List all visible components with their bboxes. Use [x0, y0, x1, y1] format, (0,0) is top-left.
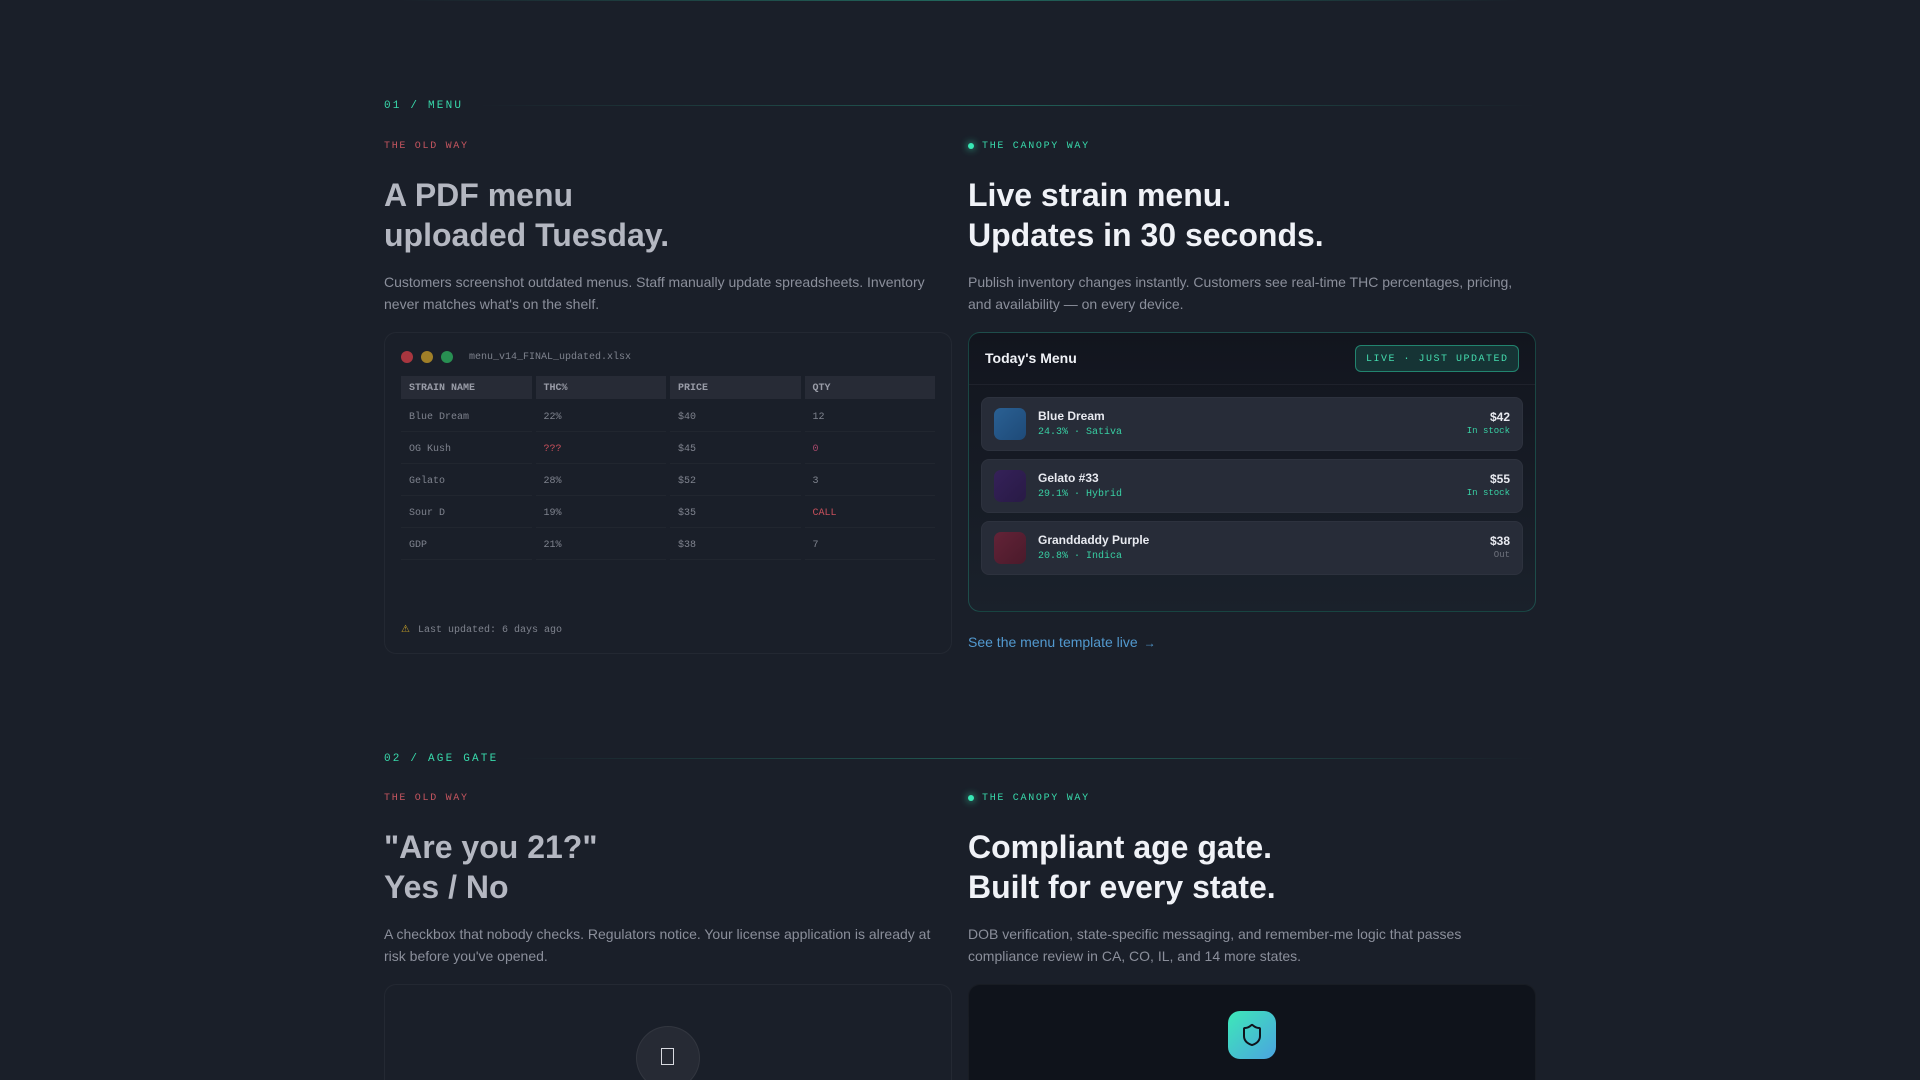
canopy way eyebrow: THE CANOPY WAY: [982, 793, 1090, 804]
spreadsheet table: STRAIN NAME: [409, 383, 475, 394]
old way eyebrow: THE OLD WAY: [384, 141, 469, 152]
strain info: Granddaddy Purple: [1038, 533, 1149, 547]
menu row: gelato: [981, 459, 1523, 513]
panel: spreadsheet mockup: [384, 332, 952, 654]
spreadsheet table: $52: [678, 476, 696, 487]
menu row: granddaddy purple: Out: [1494, 550, 1510, 560]
link: menu template: See the menu template live →: [968, 634, 1156, 650]
spreadsheet table: 0: [812, 444, 819, 455]
strain info: Gelato #33: [1038, 471, 1099, 485]
spreadsheet table: CALL: [812, 508, 837, 519]
old way description: Customers screenshot outdated menus. Staff manually update spreadsheets. Inventory: [384, 274, 925, 290]
old way headline: "Are you 21?": [384, 829, 598, 865]
spreadsheet table: PRICE: [678, 383, 708, 394]
spreadsheet table: 19%: [544, 508, 562, 519]
panel: old way heading column, menu: [384, 141, 925, 312]
icon: shield badge: [1228, 1011, 1276, 1059]
strain info: Blue Dream: [1038, 409, 1105, 423]
icon: circle with missing glyph: [636, 1026, 700, 1080]
section label: 02 / age gate: 02 / AGE GATE: [384, 753, 498, 765]
menu row: granddaddy purple: [981, 521, 1523, 575]
spreadsheet table: 12: [812, 412, 825, 423]
old way description: [384, 274, 925, 312]
warning footer: ⚠: [401, 624, 410, 635]
menu row: gelato: 29.1% · Hybrid: [1038, 489, 1122, 500]
canopy way description: DOB verification, state-specific messaging, and remember-me logic that passes: [968, 926, 1461, 942]
spreadsheet table: [401, 376, 935, 551]
spreadsheet table: 28%: [544, 476, 562, 487]
canopy way headline: Live strain menu.: [968, 177, 1231, 213]
price: $38: [1490, 534, 1510, 548]
old way headline: [384, 177, 669, 253]
price: $55: [1490, 472, 1510, 486]
old way description: [384, 926, 930, 964]
menu row: blue dream: [981, 397, 1523, 451]
spreadsheet table: 3: [812, 476, 819, 487]
canopy way description: [968, 274, 1512, 312]
panel: old age checkbox mockup: [384, 984, 952, 1080]
menu row: blue dream: 24.3% · Sativa: [1038, 427, 1122, 438]
spreadsheet filename: menu_v14_FINAL_updated.xlsx: [469, 352, 631, 363]
canopy way headline: Updates in 30 seconds.: [968, 217, 1324, 253]
spreadsheet table: 22%: [544, 412, 562, 423]
spreadsheet table: $35: [678, 508, 696, 519]
live badge: LIVE · JUST UPDATED: [1366, 354, 1509, 365]
canopy way description: and availability — on every device.: [968, 296, 1184, 312]
spreadsheet table: $38: [678, 540, 696, 551]
canopy way headline: Compliant age gate.: [968, 829, 1272, 865]
panel: canopy way heading column, menu: [964, 138, 1512, 312]
live menu title: Today's Menu: [985, 350, 1077, 366]
thumb: purple: [994, 470, 1026, 502]
panel: compliant age gate mockup: [968, 984, 1536, 1080]
spreadsheet table: 7: [812, 540, 819, 551]
canopy way description: Publish inventory changes instantly. Customers see real-time THC percentages, pricing,: [968, 274, 1512, 290]
canopy way eyebrow: THE CANOPY WAY: [982, 141, 1090, 152]
canopy way eyebrow: [964, 790, 1090, 806]
old way description: risk before you've opened.: [384, 948, 548, 964]
warning footer: Last updated: 6 days ago: [418, 625, 562, 636]
thumb: blue: [994, 408, 1026, 440]
canopy way headline: [968, 829, 1276, 905]
old way headline: A PDF menu: [384, 177, 573, 213]
canopy way headline: Built for every state.: [968, 869, 1276, 905]
spreadsheet table: QTY: [812, 383, 831, 394]
canopy way headline: [968, 177, 1324, 253]
thumb: maroon: [994, 532, 1026, 564]
panel: live menu mockup: [968, 332, 1536, 612]
spreadsheet table: Gelato: [409, 476, 445, 487]
spreadsheet table: OG Kush: [409, 444, 451, 455]
menu row: granddaddy purple: 20.8% · Indica: [1038, 551, 1122, 562]
old way headline: Yes / No: [384, 869, 508, 905]
panel: old way heading column, age gate: [384, 793, 930, 964]
menu row: blue dream: In stock: [1467, 426, 1510, 436]
old way headline: [384, 829, 598, 905]
live badge: [1355, 345, 1519, 372]
top accent line: [400, 0, 1520, 1]
spreadsheet table: THC%: [544, 383, 568, 394]
price: $42: [1490, 410, 1510, 424]
canopy way eyebrow: [964, 138, 1090, 154]
old way eyebrow: THE OLD WAY: [384, 793, 469, 804]
menu row: gelato: In stock: [1467, 488, 1510, 498]
old way description: A checkbox that nobody checks. Regulators notice. Your license application is already at: [384, 926, 930, 942]
panel: canopy way heading column, age gate: [964, 790, 1461, 964]
spreadsheet table: $45: [678, 444, 696, 455]
spreadsheet table: Sour D: [409, 508, 445, 519]
window dots: [401, 351, 453, 363]
spreadsheet table: 21%: [544, 540, 562, 551]
spreadsheet table: Blue Dream: [409, 412, 469, 423]
canopy way description: [968, 926, 1461, 964]
section label: 01 / menu: 01 / MENU: [384, 100, 463, 112]
spreadsheet table: GDP: [409, 540, 427, 551]
canopy way description: compliance review in CA, CO, IL, and 14 more states.: [968, 948, 1301, 964]
spreadsheet table: $40: [678, 412, 696, 423]
old way description: never matches what's on the shelf.: [384, 296, 599, 312]
spreadsheet table: ???: [544, 444, 562, 455]
old way headline: uploaded Tuesday.: [384, 217, 669, 253]
